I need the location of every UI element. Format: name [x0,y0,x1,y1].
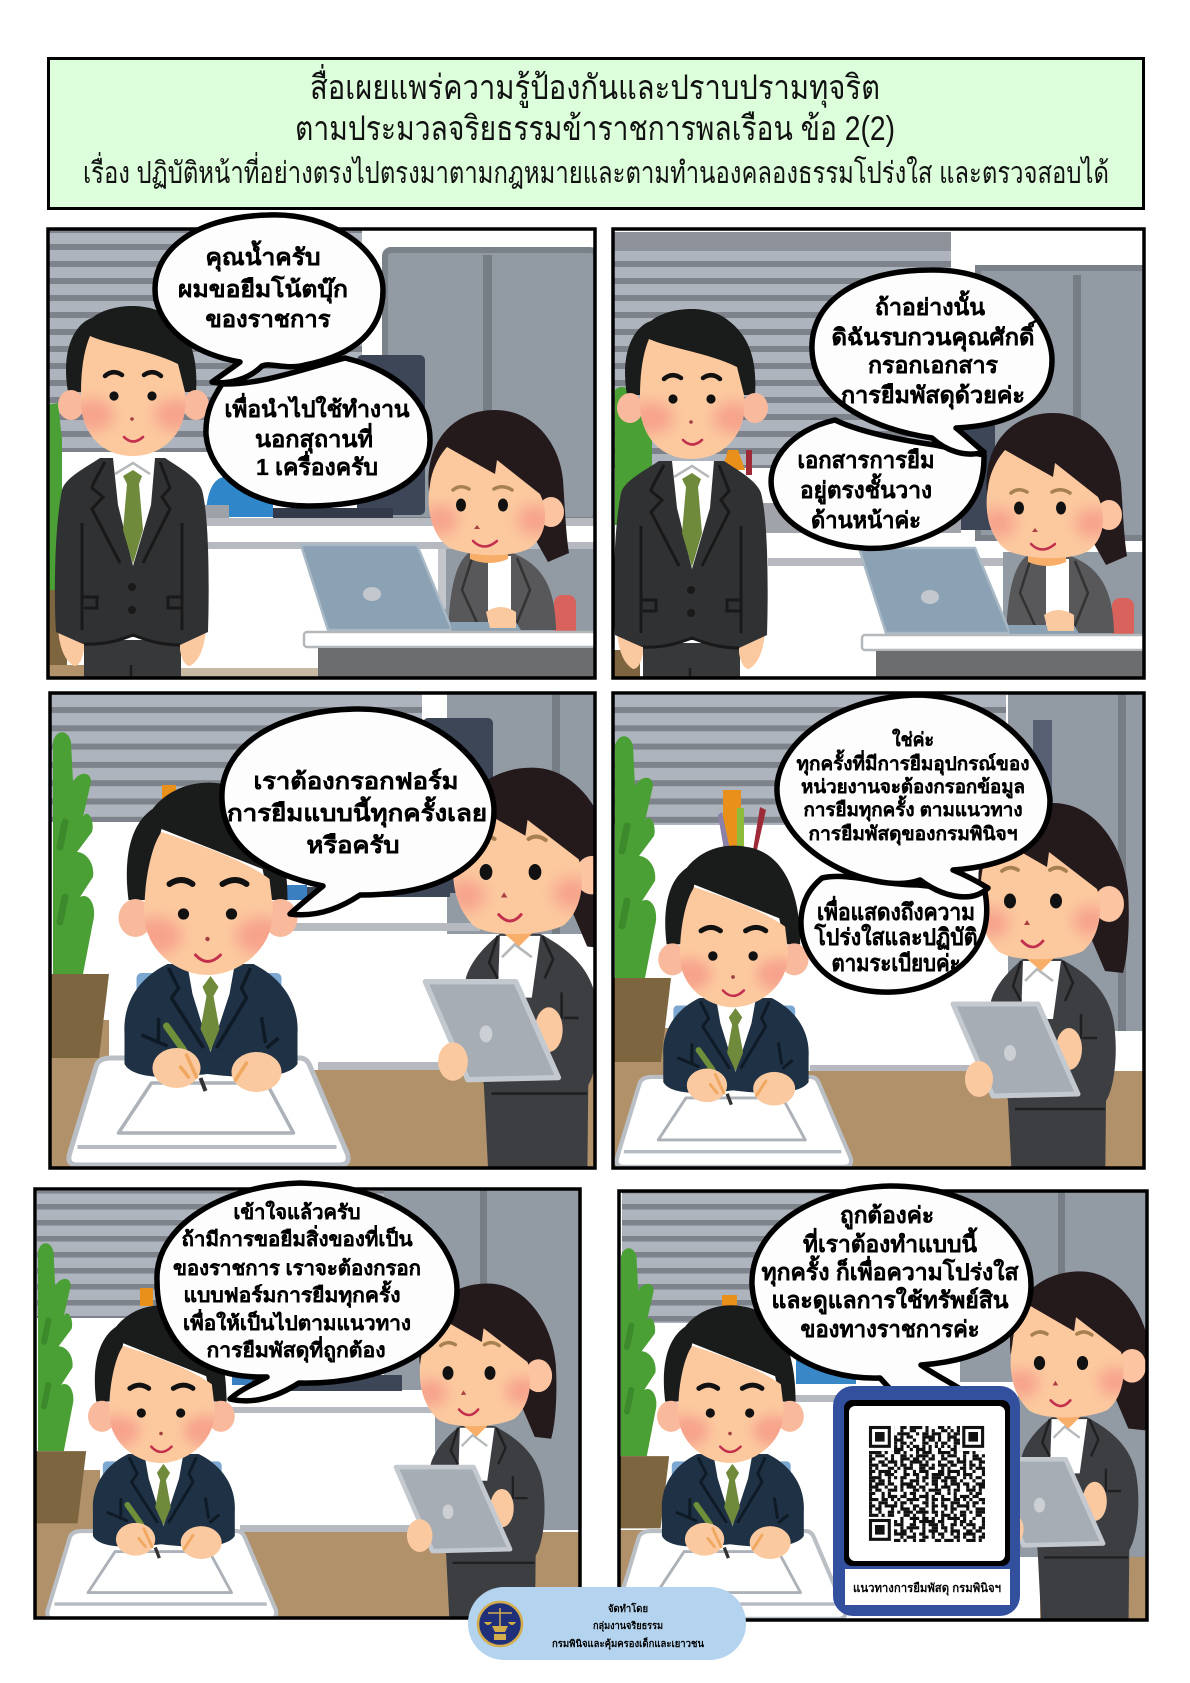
panel 5: man understands [31,1183,582,1647]
speech bubble: request: ผมขอยืมโน้ตบุ๊ก [178,275,348,304]
QR label: แนวทางการยืมพัสดุ กรมพินิจฯ [853,1581,1001,1596]
speech bubble: เข้าใจแล้วครับ [234,1200,360,1224]
speech bubble: location of form [771,420,984,548]
speech bubble: request [155,215,383,383]
speech bubble: explanation: หน่วยงานจะต้องกรอกข้อมูล [801,776,1025,799]
speech bubble: explanation: ใช่ค่ะ [892,728,934,751]
speech bubble: request: คุณน้ำครับ [206,240,320,272]
speech bubble: การยืมแบบนี้ทุกครั้งเลย [227,796,487,828]
speech bubble [752,1186,1031,1400]
panel 1 scene [47,227,608,682]
speech bubble [222,709,494,915]
man standing [55,306,209,680]
speech bubble: please fill document: ถ้าอย่างนั้น [875,290,985,320]
header banner [48,58,1144,208]
speech bubble: please fill document: การยืมพัสดุด้วยค่ะ [841,382,1025,410]
speech bubble: แบบฟอร์มการยืมทุกครั้ง [184,1280,400,1308]
speech bubble: และดูแลการใช้ทรัพย์สิน [772,1286,1009,1315]
credit text: กรมพินิจและคุ้มครองเด็กและเยาวชน [552,1636,704,1650]
panel 6 scene [614,1190,1151,1644]
panel 1: man asks to borrow notebook [47,215,608,682]
credit text: จัดทำโดย [608,1602,648,1615]
emblem [478,1602,522,1646]
speech bubble: please fill document: กรอกเอกสาร [868,352,999,378]
speech bubble: explanation: การยืมทุกครั้ง ตามแนวทาง [804,795,1022,822]
speech bubble: หรือครับ [306,832,400,858]
speech bubble: ถ้ามีการขอยืมสิ่งของที่เป็น [182,1224,413,1251]
credit text: กลุ่มงานจริยธรรม [593,1620,663,1632]
speech bubble: explanation: ทุกครั้งที่มีการยืมอุปกรณ์ของ [796,749,1030,776]
speech bubble: purpose: เพื่อนำไปใช้ทำงาน [224,392,410,422]
title line 1: สื่อเผยแพร่ความรู้ป้องกันและปราบปรามทุจริต [310,64,880,108]
credit text [552,1602,704,1650]
speech bubble: การยืมพัสดุที่ถูกต้อง [206,1335,386,1364]
panel 6: woman confirms [614,1186,1151,1644]
plant [31,1243,86,1523]
speech bubble: location of form: เอกสารการยืม [798,447,934,473]
plant [614,736,671,1062]
speech bubble: ของราชการ เราจะต้องกรอก [173,1257,421,1280]
speech bubble: เราต้องกรอกฟอร์ม [254,768,458,794]
panel 4 scene [607,692,1145,1201]
man writing [47,1305,276,1619]
woman with tablet [953,803,1129,1201]
woman at laptop [301,410,608,682]
speech bubble: ถูกต้องค่ะ [840,1202,934,1230]
footer credit pill [468,1587,746,1660]
speech bubble: ทุกครั้ง ก็เพื่อความโปร่งใส [762,1255,1019,1287]
panel 2: woman asks to fill document [612,227,1166,685]
man writing [69,783,348,1165]
woman at laptop [858,413,1142,676]
woman with tablet [396,1284,556,1647]
panel 3: man writing, woman with tablet [45,692,612,1192]
speech bubble [157,1183,457,1401]
man standing [614,309,768,683]
speech bubble: explanation [777,695,1050,897]
speech bubble: เพื่อให้เป็นไปตามแนวทาง [183,1308,411,1335]
woman with tablet [1010,1271,1146,1618]
title line 2: ตามประมวลจริยธรรมข้าราชการพลเรือน ข้อ 2(2) [295,110,895,148]
QR code [867,1424,987,1544]
speech bubble: location of form: อยู่ตรงชั้นวาง [800,473,932,505]
speech bubble: ที่เราต้องทำแบบนี้ [803,1227,978,1257]
man writing [617,846,851,1167]
speech bubble: please fill document: ดิฉันรบกวนคุณศักดิ์ [832,320,1037,352]
speech bubble: purpose: นอกสุถานที่ [255,422,373,454]
man writing [616,1305,845,1619]
panel 2 scene [612,227,1166,685]
panel 3 scene [45,692,612,1192]
plant [52,732,109,1058]
QR code card [833,1386,1020,1616]
speech bubble: ของทางราชการค่ะ [800,1316,980,1342]
woman with tablet [422,768,594,1166]
plant [620,1248,670,1528]
panel 4: woman explains [607,692,1145,1201]
speech bubble: transparency [801,876,987,992]
speech bubble: explanation: การยืมพัสดุของกรมพินิจฯ [808,823,1018,846]
panel 5 scene [31,1188,582,1647]
speech bubble: transparency: เพื่อแสดงถึงความ [817,895,975,925]
speech bubble: purpose: 1 เครื่องครับ [256,450,378,480]
speech bubble: transparency: โปร่งใสและปฏิบัติ [814,923,978,950]
speech bubble: location of form: ด้านหน้าค่ะ [811,507,921,533]
speech bubble: purpose [206,358,430,506]
speech bubble: transparency: ตามระเบียบค่ะ [832,950,960,976]
speech bubble: please fill document [812,270,1052,454]
speech bubble: request: ของราชการ [206,306,331,332]
